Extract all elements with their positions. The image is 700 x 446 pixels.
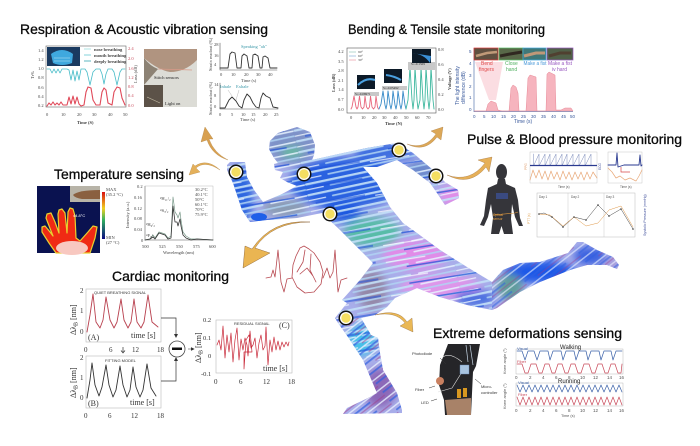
chart: strain inhale exhale [208, 81, 279, 122]
panel: breathing loss chart: Loss (dB) [133, 65, 138, 83]
sensor dot: chest [322, 206, 338, 222]
panel: light intensity chart: 20 [511, 114, 517, 119]
panel: thermal hand image: (27 °C) [106, 240, 120, 245]
chart C: residual signal: 6 [239, 378, 243, 386]
panel: thermal hand image [37, 186, 123, 255]
panel: light intensity chart: 2 [469, 84, 472, 89]
chart: strain speaking: 40 [268, 72, 273, 77]
panel: light intensity chart: 0 [473, 114, 476, 119]
chart: strain inhale exhale: 15 [251, 112, 256, 117]
panel: light intensity chart: Make a fist [524, 61, 547, 67]
chart: running knee angle: 4 [542, 408, 545, 413]
chart: running knee angle: 6 [555, 408, 558, 413]
chart B: fitting model: FITTING MODEL [105, 358, 137, 363]
chart B: fitting model: 12 [131, 412, 138, 420]
inset photo: fiber [70, 186, 100, 202]
chart: walking knee angle: 14 [607, 375, 613, 380]
photo: fiber sensor on neck: Light on [165, 101, 181, 106]
chart: strain inhale exhale: Time (s) [240, 117, 256, 122]
chart: strain inhale exhale: Exhale [236, 84, 248, 89]
photo: face mask [47, 47, 80, 66]
panel: bending loss chart: 0.8 [438, 47, 444, 52]
chart: blood pressure across days: Day 3 [606, 195, 615, 199]
chart A: quiet breathing signal: B [74, 322, 80, 326]
chart: walking knee angle: 12 [593, 375, 599, 380]
chart: walking knee angle: Visual [517, 346, 528, 351]
chart: temperature spectra: ²H₁₁/₂ [160, 196, 171, 201]
panel: light intensity chart: fingers [479, 67, 495, 73]
panel: breathing loss chart: 1.0 [38, 66, 44, 71]
heading: bending: Bending & Tensile state monitoring [348, 21, 545, 37]
chart: temperature spectra: 0.12 [134, 206, 142, 211]
chart: walking knee angle: 6 [555, 375, 558, 380]
panel: knee brace photo [412, 344, 498, 415]
chart: temperature spectra: 75.9°C [195, 212, 208, 217]
panel: breathing loss chart: 0.6 [38, 85, 44, 90]
panel: breathing loss chart: 0.8 [128, 84, 134, 89]
chart: temperature spectra: ⁴S₃/₂ [160, 208, 169, 213]
chart: strain speaking [208, 37, 277, 83]
chart B: fitting model [69, 354, 164, 420]
panel: bending loss chart: Time (N) [385, 121, 403, 126]
chart: walking knee angle [502, 345, 625, 380]
panel: bending loss chart: S=-0.06971 [355, 92, 371, 96]
panel: light intensity chart: 5 [483, 114, 486, 119]
panel: breathing loss chart: 0.8 [38, 75, 44, 80]
panel: light intensity chart: 10 [491, 114, 497, 119]
chart A: quiet breathing signal: QUIET BREATHING SIGNAL [94, 290, 147, 295]
arrow: to extreme deformations [375, 313, 413, 332]
panel: breathing loss chart: 0.0 [128, 103, 134, 108]
chart: strain speaking: Strain readout (%) [208, 37, 213, 71]
panel: bending loss chart: 40 [393, 115, 398, 120]
chart: strain inhale exhale: 10 [241, 112, 246, 117]
panel: bending loss chart: 1.4 [338, 87, 344, 92]
arrow: to respiration [201, 127, 228, 160]
chart: walking knee angle: Knee angle (°) [502, 348, 507, 374]
icon: human silhouette: Optical [493, 213, 503, 217]
chart: temperature spectra: 0 [141, 238, 144, 243]
chart: strain inhale exhale: 8 [214, 93, 217, 98]
chart C: residual signal [194, 317, 296, 386]
chart: temperature spectra: 0.04 [134, 227, 143, 232]
panel: bending loss chart: 50 [404, 115, 409, 120]
sensor dot: forearm [428, 168, 444, 184]
icon: human silhouette [480, 164, 523, 234]
panel: knee brace photo: Fiber [415, 387, 425, 392]
chart: temperature spectra: 525 [159, 244, 166, 249]
subtraction operator and connectors [121, 318, 194, 381]
panel: breathing loss chart: Tr% [30, 71, 35, 79]
chart A: quiet breathing signal: [nm] [69, 304, 78, 322]
panel: knee brace photo: Micro- [481, 384, 493, 389]
panel: breathing loss chart: deeply breathing [94, 59, 127, 64]
chart: strain speaking: 10 [231, 72, 236, 77]
chart: temperature spectra: 0.16 [134, 195, 143, 200]
chart A: quiet breathing signal: 2 [80, 287, 84, 295]
chart B: fitting model: [nm] [69, 367, 78, 385]
chart: strain inhale exhale: Strain readout (%) [208, 81, 213, 115]
chart C: residual signal: RESIDUAL SIGNAL [234, 321, 270, 326]
chart A: quiet breathing signal: (A) [88, 333, 99, 342]
panel: bending loss chart: 4.2 [338, 49, 344, 54]
chart B: fitting model: (B) [88, 399, 99, 408]
chart C: residual signal: 18 [288, 378, 296, 386]
panel: bending loss chart: 0.6 [438, 62, 444, 67]
chart: strain speaking: Speaking "ah" [241, 44, 267, 49]
chart: strain inhale exhale: 14 [214, 82, 219, 87]
panel: breathing loss chart: 1.6 [128, 66, 134, 71]
panel: bending loss chart: 20 [372, 115, 377, 120]
chart C: residual signal: time [s] [263, 364, 288, 373]
chart C: residual signal: 0 [208, 353, 211, 360]
panel: knee brace photo: controller [481, 390, 498, 395]
chart: strain inhale exhale: 0 [219, 112, 222, 117]
panel: bending loss chart: 0.0 [338, 107, 344, 112]
chart B: fitting model: 1 [80, 374, 84, 382]
panel: light intensity chart: Time (s) [514, 119, 532, 125]
chart C: residual signal: -0.1 [201, 371, 211, 378]
photo: 60 degree bend [384, 69, 402, 83]
panel: thermal hand image: MAX [106, 187, 117, 192]
sensor dot: knee [338, 310, 354, 326]
chart: strain inhale exhale: 5 [231, 112, 234, 117]
panel: bending loss chart: 2.1 [338, 78, 344, 83]
chart: temperature spectra: ⁴F₉/₂ [146, 233, 155, 238]
chart: strain speaking: 16 [214, 53, 219, 58]
chart C: residual signal: B [198, 350, 204, 354]
chart B: fitting model: 18 [157, 412, 164, 420]
panel: breathing loss chart [30, 46, 138, 125]
chart: temperature spectra: Intensity (a.u.) [125, 201, 130, 228]
chart: temperature spectra: 600 [209, 244, 216, 249]
panel: light intensity chart: 30 [531, 114, 537, 119]
panel: light intensity chart: 0 [469, 107, 472, 112]
chart: walking knee angle: 10 [580, 375, 586, 380]
heading: extreme deformations: Extreme deformations sensing [433, 325, 622, 341]
panel: breathing loss chart: 50 [123, 112, 128, 117]
panel: bending loss chart: Voltage (V) [447, 68, 452, 90]
chart B: fitting model: 6 [108, 412, 112, 420]
panel: light intensity chart: Make a fist [548, 61, 573, 67]
panel: light intensity chart: 40 [551, 114, 557, 119]
chart: walking knee angle: Fiber [517, 359, 527, 364]
chart: running knee angle: 10 [580, 408, 586, 413]
chart: running knee angle: 14 [607, 408, 613, 413]
chart: walking knee angle: 0 [515, 375, 518, 380]
chart: temperature spectra: ²H₉/₂ [146, 222, 155, 227]
photo: make a fist [523, 48, 546, 60]
chart: running knee angle: Visual [518, 380, 529, 385]
chart A: quiet breathing signal: 0 [84, 346, 88, 354]
chart: strain inhale exhale: Inhale [220, 84, 231, 89]
chart A: quiet breathing signal: 1 [80, 307, 84, 315]
panel: breathing loss chart: Time (S) [77, 120, 94, 125]
chart A: quiet breathing signal: 6 [109, 346, 113, 354]
chart: running knee angle: 8 [568, 408, 571, 413]
panel: breathing loss chart: 30 [92, 112, 97, 117]
panel: bending loss chart: 10 [361, 115, 366, 120]
panel: breathing loss chart: 1.2 [128, 75, 134, 80]
panel: breathing loss chart: 1.4 [38, 48, 44, 53]
chart: pulse and ECG overview [524, 152, 602, 189]
heading: respiration: Respiration & Acoustic vibration sensing [20, 21, 268, 37]
chart: walking knee angle: 2 [529, 375, 532, 380]
chart: blood pressure across days [527, 193, 647, 237]
photo: make a fist hard [547, 48, 573, 60]
panel: bending loss chart: 0.2 [438, 92, 444, 97]
panel: light intensity chart: difference (dB) [461, 71, 467, 104]
photo: 30 degree bend [357, 75, 375, 89]
chart A: quiet breathing signal: 0 [80, 328, 84, 336]
panel: light intensity chart [455, 48, 576, 125]
chart: running knee angle: 16 [619, 408, 625, 413]
panel: light intensity chart: iv hard [552, 67, 567, 73]
heading: cardiac: Cardiac monitoring [112, 268, 229, 284]
panel: bending loss chart: 30° [358, 58, 364, 62]
panel: bending loss chart: 0 [350, 115, 353, 120]
panel: bending loss chart: 3.5 [338, 59, 344, 64]
panel: bending loss chart: S=-0.05492 [383, 86, 399, 90]
runner figure with striped texture [220, 120, 630, 420]
panel: light intensity chart: 1 [469, 95, 472, 100]
panel: bending loss chart [331, 47, 452, 126]
panel: light intensity chart: 15 [501, 114, 507, 119]
panel: light intensity chart: 25 [521, 114, 527, 119]
chart: blood pressure across days: Systolic Pressure (mmHg) [643, 194, 647, 236]
panel: light intensity chart: 45 [561, 114, 567, 119]
panel: thermal hand image: 44.8°C [73, 213, 85, 218]
chart: walking knee angle: 8 [568, 375, 571, 380]
arrow: to pulse [447, 157, 492, 180]
panel: bending loss chart: Loss (dB) [331, 73, 336, 92]
panel: breathing loss chart: 20 [77, 112, 82, 117]
chart: strain speaking: 0 [220, 72, 223, 77]
photo: 90 degree bend [412, 49, 431, 63]
chart: temperature spectra: 50°C [195, 197, 204, 202]
chart: strain inhale exhale: 20 [263, 112, 268, 117]
chart B: fitting model: 2 [80, 354, 84, 362]
chart: strain speaking: 20 [244, 72, 249, 77]
chart A: quiet breathing signal: 12 [132, 346, 140, 354]
panel: breathing loss chart: 2.0 [128, 56, 134, 61]
photo: fiber sensor on neck: Stitch sensors [154, 75, 179, 80]
chart A: quiet breathing signal: Δλ [69, 326, 78, 335]
chart: temperature spectra: 575 [193, 244, 200, 249]
chart B: fitting model: 0 [80, 394, 84, 402]
chart: pulse detail: Time (s) [620, 185, 632, 189]
chart: running knee angle: 12 [593, 408, 599, 413]
chart B: fitting model: time [s] [130, 398, 155, 407]
panel: knee brace photo: Photodiode [412, 351, 433, 356]
chart: running knee angle [502, 379, 625, 418]
chart: temperature spectra: 60.1°C [195, 202, 208, 207]
chart C: residual signal: 0.2 [203, 317, 211, 324]
panel: light intensity chart: Bend [481, 61, 493, 67]
panel: bending loss chart: 70 [426, 115, 431, 120]
chart: temperature spectra: 550 [176, 244, 184, 249]
chart: pulse and ECG overview: ECG [598, 163, 602, 170]
chart C: residual signal: 12 [263, 378, 270, 386]
panel: breathing loss chart: 0.4 [38, 94, 44, 99]
arrow: to cardiac [243, 222, 310, 268]
panel: breathing loss chart: 0.4 [128, 93, 134, 98]
panel: bending loss chart: 30 [382, 115, 387, 120]
chart: running knee angle: Time (s) [561, 414, 576, 418]
chart: running knee angle: 0 [515, 408, 518, 413]
sensor dot: neck [296, 166, 312, 182]
chart: blood pressure across days: PTT (s) [527, 213, 531, 224]
panel: bending loss chart: 60° [358, 54, 364, 58]
chart: temperature spectra: 30.2°C [195, 187, 208, 192]
chart A: quiet breathing signal [69, 287, 164, 354]
photo: bend fingers [474, 48, 498, 60]
chart: strain inhale exhale: 0 [214, 104, 217, 109]
panel: light intensity chart: 5 [469, 49, 472, 54]
panel: bending loss chart: 0.4 [438, 77, 444, 82]
chart: pulse and ECG overview: PPG [524, 163, 528, 170]
chart: walking knee angle: 16 [619, 375, 625, 380]
panel: light intensity chart: 4 [469, 61, 472, 66]
chart: walking knee angle: 4 [542, 375, 545, 380]
chart C: residual signal: (C) [279, 321, 290, 330]
heading: pulse: Pulse & Blood pressure monitoring [467, 131, 682, 147]
chart: running knee angle: Knee angle (°) [502, 383, 507, 409]
panel: breathing loss chart: 1.2 [38, 57, 44, 62]
panel: bending loss chart: 0.0 [438, 107, 444, 112]
panel: breathing loss chart: 40 [108, 112, 113, 117]
panel: breathing loss chart: 10 [61, 112, 66, 117]
panel: light intensity chart: hand [506, 67, 517, 73]
panel: light intensity chart: Close [505, 61, 518, 67]
chart: strain inhale exhale: 25 [274, 112, 279, 117]
sensor dot: elbow [392, 142, 406, 158]
panel: light intensity chart: 35 [541, 114, 547, 119]
panel: breathing loss chart: 0 [46, 112, 49, 117]
chart A: quiet breathing signal: time [s] [131, 331, 156, 340]
panel: bending loss chart: 90° [358, 50, 364, 54]
chart: temperature spectra: 500 [142, 244, 150, 249]
icon: human silhouette: sensor [493, 217, 504, 221]
panel: thermal hand image: (35.2 °C) [106, 192, 123, 197]
chart: strain speaking: 28 [214, 42, 219, 47]
panel: breathing loss chart: 2.4 [128, 46, 134, 51]
chart C: residual signal: 0.1 [203, 335, 211, 342]
chart: temperature spectra: 0.08 [134, 216, 143, 221]
arrow: to bending [407, 127, 443, 147]
photo: close hand [499, 48, 523, 60]
arrow: to temperature [189, 163, 220, 175]
chart: pulse detail [608, 152, 642, 189]
chart: temperature spectra [125, 184, 216, 255]
panel: breathing loss chart: 0.2 [38, 103, 44, 108]
chart: strain speaking: Time (s) [241, 78, 257, 83]
chart: temperature spectra: 70°C [195, 207, 204, 212]
chart: temperature spectra: Wavelength (nm) [163, 250, 195, 255]
photo: fiber sensor on neck [144, 49, 197, 107]
panel: bending loss chart: 2.8 [338, 68, 344, 73]
chart: blood pressure across days: Day 1 [539, 195, 548, 199]
chart: strain speaking: 30 [256, 72, 261, 77]
chart: running knee angle: 2 [529, 408, 532, 413]
chart C: residual signal: [nm] [194, 332, 203, 350]
chart B: fitting model: 0 [84, 412, 88, 420]
heart and ECG trace [266, 246, 347, 293]
panel: bending loss chart: 0.7 [338, 97, 344, 102]
panel: breathing loss chart: nose breathing [94, 47, 123, 52]
chart: running knee angle: Fiber [518, 392, 528, 397]
panel: thermal hand image: MIN [106, 235, 115, 240]
panel: knee brace photo: LED [421, 400, 429, 405]
panel: bending loss chart: S=-0.1329 [411, 62, 425, 66]
sensor dot: wrist [228, 164, 244, 180]
chart: pulse and ECG overview: Time (s) [558, 185, 570, 189]
chart B: fitting model: B [74, 385, 80, 389]
chart: temperature spectra: 0.2 [137, 184, 143, 189]
panel: breathing loss chart: mouth breathing [94, 53, 127, 58]
chart: walking knee angle: Walking [560, 345, 581, 351]
chart: running knee angle: Running [558, 379, 580, 385]
chart: temperature spectra: 40.1°C [195, 192, 208, 197]
panel: light intensity chart: 50 [570, 114, 576, 119]
chart C: residual signal: Δλ [194, 354, 203, 363]
chart: strain speaking: 4 [214, 62, 217, 67]
chart C: residual signal: 0 [214, 378, 218, 386]
heading: temperature: Temperature sensing [54, 166, 184, 182]
panel: bending loss chart: 60 [415, 115, 420, 120]
panel: light intensity chart: The light intensity [455, 66, 461, 105]
chart: blood pressure across days: Day 2 [571, 195, 580, 199]
panel: light intensity chart: 3 [469, 73, 472, 78]
chart B: fitting model: Δλ [69, 389, 78, 398]
chart A: quiet breathing signal: 18 [157, 346, 164, 354]
